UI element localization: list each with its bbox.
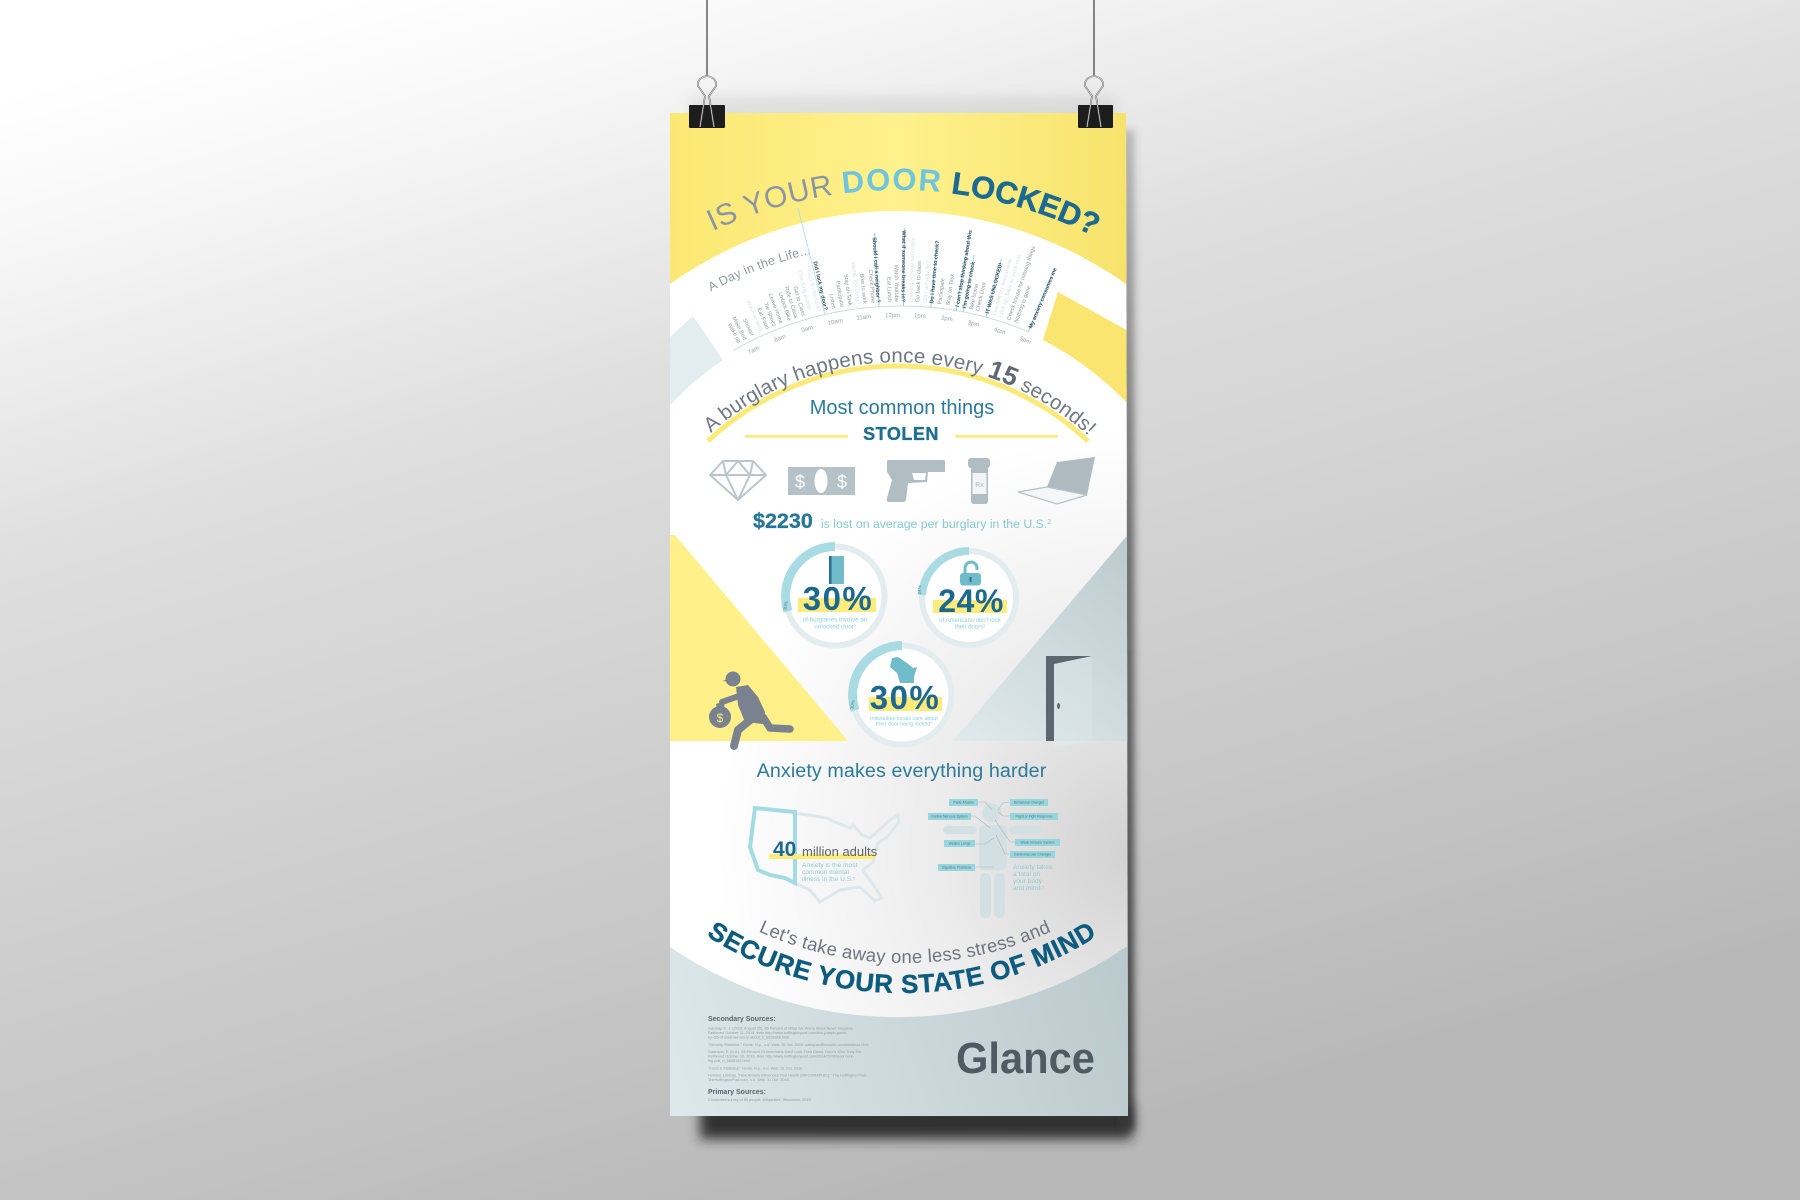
body diagram: Digestive Problems <box>942 866 971 870</box>
timeline arc and entries: Watch Youtube <box>893 265 899 302</box>
icon: pill bottle: Rx <box>975 482 984 489</box>
timeline arc and entries: Did I lock my door? <box>811 261 828 311</box>
timeline arc and entries: Bike home <box>969 283 980 310</box>
stat circle: Milwaukee locals: their door being locked <box>876 722 930 728</box>
poster sheet <box>660 113 1136 1120</box>
icon: pill bottle <box>968 458 990 504</box>
timeline arc and entries: Ride to Class <box>783 286 799 320</box>
white day-in-the-life disc <box>660 211 1136 500</box>
stat circle: unlocked door: unlocked door <box>814 624 854 630</box>
timeline arc and entries: Did I actually lie? <box>923 261 932 303</box>
timeline arc and entries: Leave Home <box>767 293 784 325</box>
timeline arc and entries: Looking outside nervously <box>909 237 917 302</box>
poster content <box>670 113 1128 1116</box>
highlight <box>798 598 876 612</box>
icon: cash: $ <box>795 472 805 492</box>
stat circle: unlocked homes <box>917 551 1016 645</box>
timeline arc and entries: Make Bed <box>730 316 747 341</box>
connector lines <box>971 802 1015 867</box>
timeline arc and entries: Wash to work <box>745 300 764 333</box>
highlight <box>869 697 942 711</box>
logo: Glance: Glance <box>956 1034 1095 1083</box>
timeline arc and entries: Lock up, back to work now <box>998 253 1024 318</box>
timeline arc and entries: 10am <box>827 318 843 327</box>
title <box>706 168 1100 233</box>
stat circle: unlocked door: 30% <box>782 601 789 611</box>
stat: average loss: is lost on average per burglary in the U.S. <box>821 517 1047 531</box>
title: DOOR <box>842 168 940 194</box>
timeline arc and entries: IT WAS UNLOCKED! <box>985 262 1004 314</box>
sources: Holmes, Lindsay. "How Anxiety Influences Your Health (INFOGRAPHIC)." The Huffington Post. <box>708 1074 867 1078</box>
timeline arc and entries <box>726 228 1059 356</box>
timeline arc and entries: Wake up <box>726 322 742 344</box>
grey triangle <box>953 532 1130 741</box>
timeline arc and entries: I can't stop thinking about this <box>955 230 974 308</box>
timeline arc and entries: 8am <box>774 334 787 344</box>
poster lighting <box>815 530 1128 1017</box>
timeline arc and entries: Bike to work <box>858 273 867 304</box>
timeline arc and entries: 4pm <box>993 327 1006 336</box>
stat circle: unlocked homes: 24% <box>917 585 922 595</box>
symptom labels <box>928 799 1060 871</box>
icon: keyhole in the O <box>980 181 984 185</box>
body diagram: Central Nervous System <box>931 815 968 819</box>
sources: Retrieved October 11, 2016, from http://www.huffingtonpost.com/don-joseph-goew- <box>708 1031 848 1035</box>
timeline heading: A Day in the Life... <box>710 250 810 292</box>
timeline arc and entries: 12pm <box>885 313 900 319</box>
body caption: a total on <box>1013 871 1040 878</box>
timeline arc and entries: Go back to class <box>915 261 923 303</box>
heading: most common things stolen <box>745 397 1058 444</box>
sources: Retrieved October 16, 2016, from http://www.huffingtonpost.com/2014/09/30/door-lock- <box>708 1054 855 1058</box>
timeline arc and entries: 5pm <box>1018 336 1032 346</box>
timeline arc and entries: 9am <box>801 325 814 334</box>
timeline arc and entries: Check Door <box>975 282 988 312</box>
timeline arc and entries: Get to Class <box>791 286 806 317</box>
left grey wedge <box>670 316 723 405</box>
timeline arc and entries: Check Phone <box>867 269 875 303</box>
US map with statistic: illness in the U.S. <box>802 876 853 883</box>
highlight <box>933 600 1007 613</box>
icon: cash <box>788 467 855 495</box>
timeline arc and entries: Checking phone... <box>796 270 813 315</box>
yellow underline arc <box>708 366 1088 441</box>
timeline arc and entries: Shower <box>741 318 755 338</box>
body caption: 5 <box>1042 886 1044 890</box>
US map with statistic: Anxiety is the most <box>802 862 858 869</box>
timeline arc and entries: Nothing is gone <box>1014 285 1033 324</box>
timeline arc and entries: My anxiety consumes me <box>1028 267 1059 329</box>
sources <box>708 1016 869 1102</box>
timeline arc and entries: 11am <box>856 314 871 322</box>
stat circle: unlocked door: of burglaries involve an <box>803 616 868 624</box>
stat circle: unlocked door: 3 <box>854 624 856 628</box>
timeline: a day in the life <box>710 208 1059 356</box>
timeline arc and entries: Eat Lunch <box>885 277 892 302</box>
icon: Wisconsin <box>890 657 917 683</box>
closing headline: SECURE YOUR STATE OF MIND <box>708 922 1094 994</box>
timeline arc and entries: 1pm <box>914 313 926 320</box>
body diagram: Cardiovascular Changes <box>1014 853 1051 857</box>
US map with statistic: common mental <box>802 869 849 876</box>
stat circle: unlocked homes: 3 <box>983 624 985 628</box>
timeline arc and entries: I'm going to check <box>962 261 977 309</box>
sources: Secondary Sources: <box>708 1016 776 1023</box>
timeline arc and entries: Should I call a neighbor ? <box>871 237 881 303</box>
body diagram: Behavioral Changes <box>1014 801 1045 805</box>
body caption <box>1013 864 1053 892</box>
tall marker line <box>798 208 825 315</box>
US map with statistic <box>750 808 899 902</box>
timeline arc and entries: 2pm <box>941 316 953 323</box>
body caption: your body <box>1013 878 1043 885</box>
timeline arc and entries: 3pm <box>967 320 980 329</box>
title: LOCKED? <box>952 172 1100 233</box>
sources: Swanson, E. (n.d.). 24 Percent Of Americans Don't Lock Their Doors. Here's Who They Are. <box>708 1050 862 1054</box>
stat circle: Milwaukee locals: 6 <box>930 721 932 725</box>
highlight <box>769 854 875 859</box>
icon: door <box>829 556 844 584</box>
timeline arc and entries: Waste Too Long? <box>850 261 861 305</box>
sources: ey-/85-of-what-we-worry-about_b_8028368.html <box>708 1036 789 1040</box>
timeline arc and entries: Learned my lesson now <box>992 257 1014 316</box>
US map with statistic: 5 <box>853 876 855 880</box>
body diagram <box>928 799 1060 918</box>
sources: ing-poll_n_5898192.html <box>708 1059 750 1063</box>
yellow triangle <box>670 535 848 741</box>
stat circle: unlocked door <box>782 546 884 646</box>
icon: burglar with money bag <box>709 672 790 746</box>
heading: most common things stolen: STOLEN <box>863 424 939 444</box>
timeline arc and entries: Check house for missing things <box>1006 245 1037 321</box>
timeline arc and entries: Tie Shoes <box>762 302 777 328</box>
US map with statistic: 40 <box>773 838 796 861</box>
stat: average loss <box>753 509 1051 533</box>
stat circle: Milwaukee locals: 30% <box>849 700 856 710</box>
stat: average loss: 2 <box>1047 519 1051 526</box>
icon: laptop <box>1018 457 1095 504</box>
icon: diamond <box>710 461 766 500</box>
right binder clip and wire <box>1078 0 1113 128</box>
body diagram: Weak Immune System <box>1020 841 1055 845</box>
timeline arc and entries: What if someone breaks in? <box>900 230 906 302</box>
stat: average loss: $2230 <box>753 509 813 533</box>
icon: cash: $ <box>837 472 847 492</box>
heading: anxiety: Anxiety makes everything harder <box>757 760 1047 782</box>
title: IS YOUR <box>706 176 832 230</box>
stat circle: unlocked homes: of Americans don't lock <box>939 618 1002 624</box>
sources: Primary Sources: <box>708 1089 766 1096</box>
sources: TheHuffingtonPost.com, n.d. Web. 31 Oct. 2016. <box>708 1078 790 1082</box>
icon: handgun <box>887 460 945 502</box>
sources: "Facts & Statistics." Home. N.p., n.d. Web. 31 Oct. 2016. <box>708 1066 803 1070</box>
body caption: and mind. <box>1013 885 1042 892</box>
timeline arc and entries: Participate <box>937 278 946 305</box>
icon: burglar with money bag: $ <box>717 711 724 725</box>
sources: Conducted survey of 50 people. Milwaukee, Wisconsin. 2016. <box>708 1098 812 1102</box>
timeline arc and entries: Stay on Task <box>946 273 956 306</box>
stat circle: Milwaukee locals: milwaukee locals care about <box>870 716 938 722</box>
right yellow wedge <box>1043 292 1130 406</box>
body diagram: Flight or Fight Response <box>1016 815 1053 819</box>
timeline arc and entries: Did I do the lock? <box>805 269 821 313</box>
body caption: Anxiety takes <box>1013 864 1053 871</box>
stat circle: unlocked homes: 24% <box>938 583 1004 619</box>
sources: "Security Statistics." Home. N.p., n.d. Web. 09 Oct. 2016. safeguardtheworld.com/statistics.html <box>708 1043 869 1047</box>
timeline arc and entries: 7am <box>747 345 760 356</box>
stat circle: Milwaukee locals: 30% <box>870 679 940 716</box>
timeline arc and entries: Eat Food <box>755 307 770 330</box>
sources: Gazway, D. J. (2015, August 25). 85 Percent of What We Worry About Never Happens. <box>708 1026 854 1030</box>
body diagram: Panic Attacks <box>953 801 974 805</box>
heading: most common things stolen: Most common things <box>810 397 994 419</box>
figure <box>943 804 1042 918</box>
timeline arc and entries: Stay on Task <box>842 274 853 306</box>
burglary headline: A burglary happens once every 15 seconds! <box>706 351 1096 435</box>
stat circle: Milwaukee locals <box>849 646 952 744</box>
poster shadow <box>690 96 1134 1139</box>
stat circle: unlocked door: 30% <box>803 580 873 617</box>
yellow header band <box>670 113 1130 313</box>
timeline arc and entries: Do I have time to check? <box>929 240 941 304</box>
body diagram: Weaker Lungs <box>949 842 971 846</box>
footer band <box>660 940 1136 1120</box>
US map with statistic: million adults <box>802 844 878 859</box>
timeline arc and entries: Participate <box>834 281 844 308</box>
icon: open door <box>1046 656 1092 747</box>
timeline arc and entries: Listen <box>828 293 836 309</box>
left binder clip and wire <box>689 0 725 128</box>
stat circle: unlocked homes: their doors <box>955 624 983 630</box>
timeline arc and entries: Unlock Bike <box>777 292 792 322</box>
icon: open padlock <box>960 562 981 586</box>
closing headline: Let's take away one less stress and <box>760 920 1050 966</box>
